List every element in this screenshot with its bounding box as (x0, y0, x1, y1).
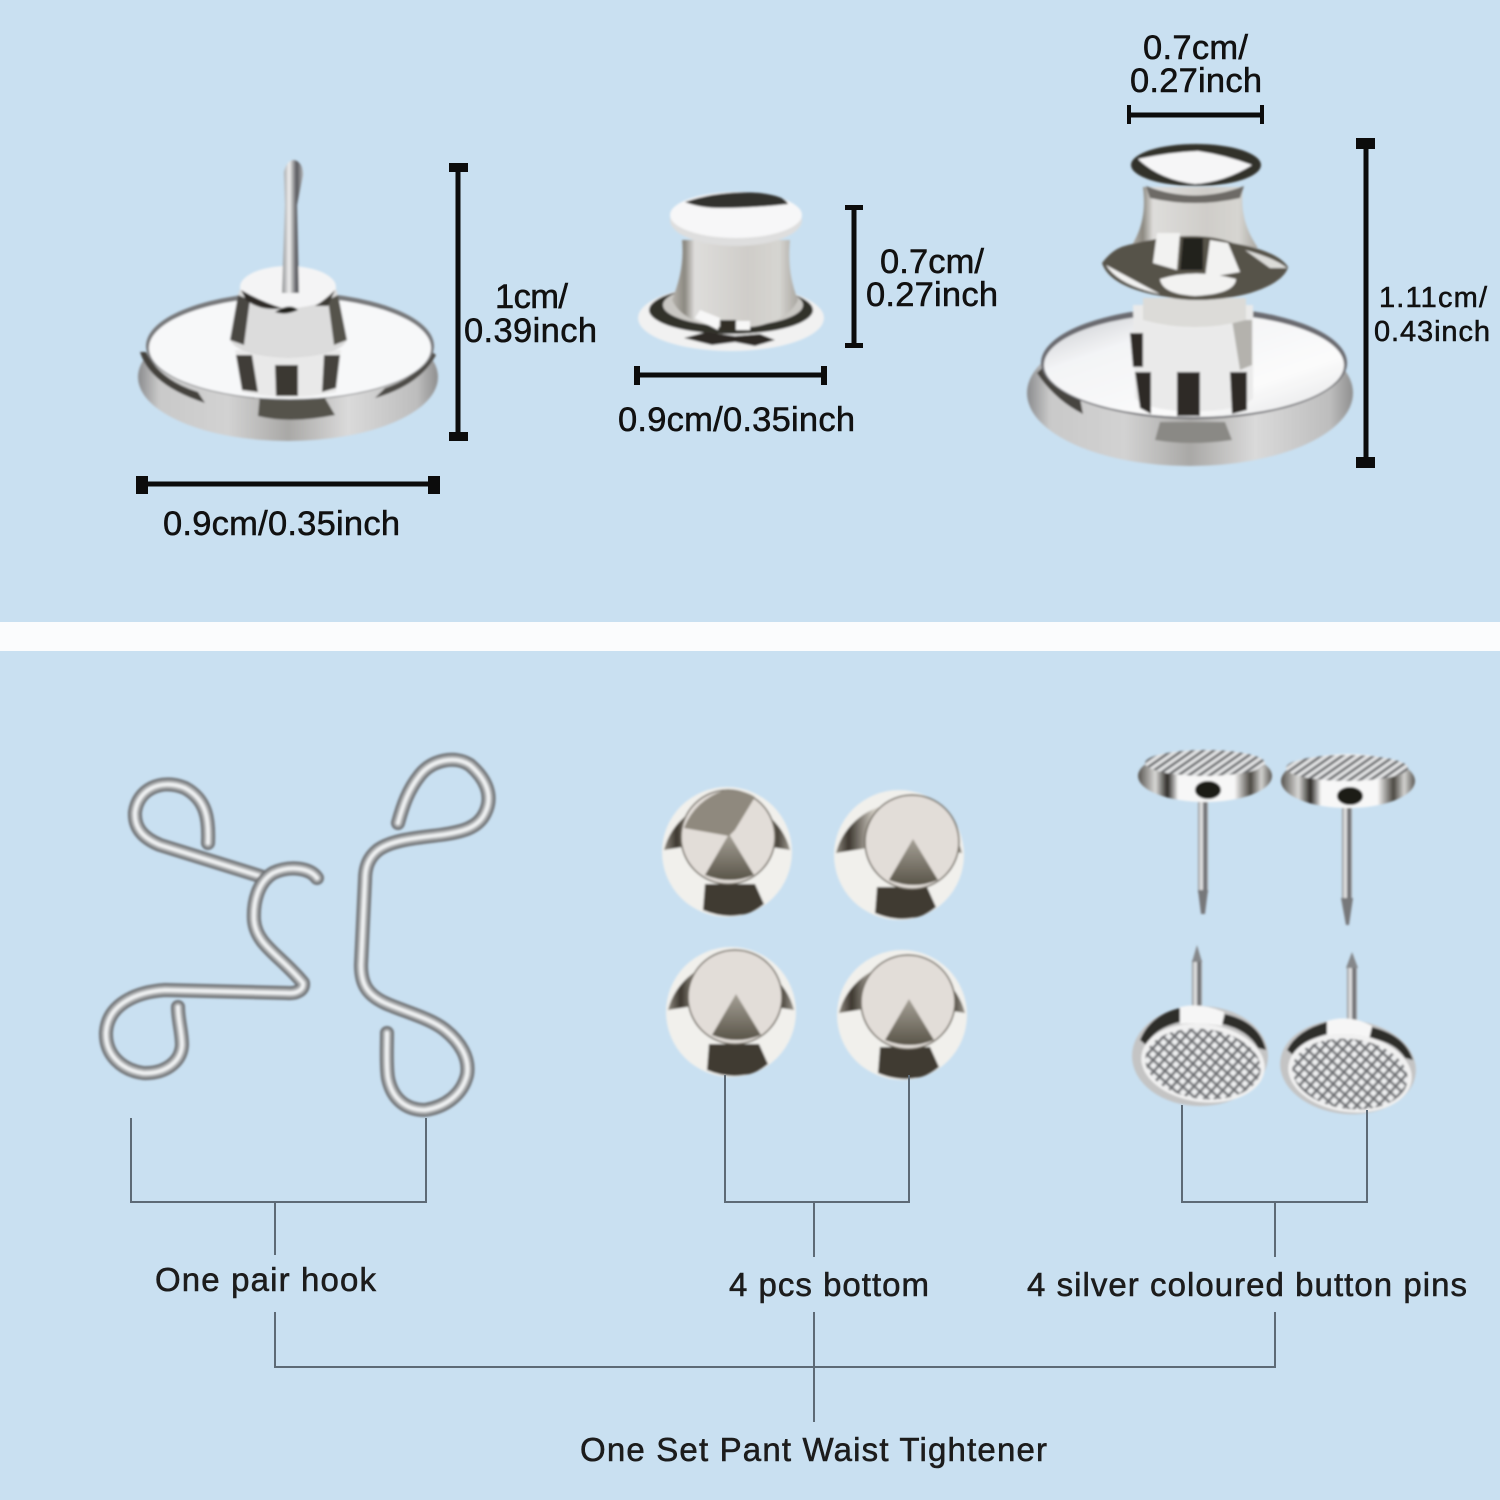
background: top panel (0, 0, 1500, 622)
panel: contents (106, 750, 1467, 1468)
product: clutch back (638, 192, 824, 351)
label: One pair hook: One pair hook (155, 1261, 376, 1298)
label: 0.7cm/0.27inch top: 0.27inch (1130, 62, 1262, 100)
dimension: 1cm height bar (449, 163, 468, 441)
label: 0.7cm/0.27inch middle: 0.7cm/ (880, 243, 984, 281)
background: bottom panel (0, 651, 1500, 1500)
label: 4 pcs bottom: 4 pcs bottom (729, 1266, 929, 1303)
dimension: 0.9cm width bar middle (634, 366, 827, 385)
label: 0.7cm/0.27inch top: 0.7cm/ (1143, 29, 1248, 67)
label: 0.9cm/0.35inch middle: 0.9cm/0.35inch (618, 401, 855, 439)
bracket: pins (1182, 1105, 1367, 1257)
label: 1.11cm/0.43inch: 1.11cm/ (1379, 282, 1488, 314)
dimension: 0.7cm height bar (845, 205, 863, 348)
label: One Set Pant Waist Tightener: One Set Pant Waist Tightener (580, 1431, 1047, 1468)
product: four buttons (662, 787, 967, 1080)
label: 1cm/0.39inch: 1cm/ (495, 278, 568, 316)
bracket: one set (275, 1312, 1275, 1422)
bracket: hook (131, 1118, 426, 1255)
bracket: bottoms (725, 1075, 909, 1257)
label: 0.9cm/0.35inch left: 0.9cm/0.35inch (163, 505, 400, 543)
white divider band (0, 622, 1500, 651)
label: 1.11cm/0.43inch: 0.43inch (1374, 316, 1490, 348)
product: pin with stem, 1cm tall (138, 160, 438, 441)
label: 1cm/0.39inch: 0.39inch (464, 312, 597, 350)
product: assembled pin and back (1027, 144, 1353, 466)
product: four mesh pins (1132, 750, 1420, 1120)
product: left hook (106, 784, 317, 1073)
label: 0.7cm/0.27inch middle: 0.27inch (866, 276, 998, 314)
product: right hook (361, 760, 489, 1110)
panel: dimensions (136, 29, 1490, 543)
dimension: 0.9cm width bar (136, 476, 440, 494)
dimension: 0.7cm top bar (1127, 105, 1264, 124)
label: 4 silver coloured button pins: 4 silver coloured button pins (1027, 1266, 1467, 1303)
dimension: 1.11cm height bar (1356, 138, 1375, 468)
